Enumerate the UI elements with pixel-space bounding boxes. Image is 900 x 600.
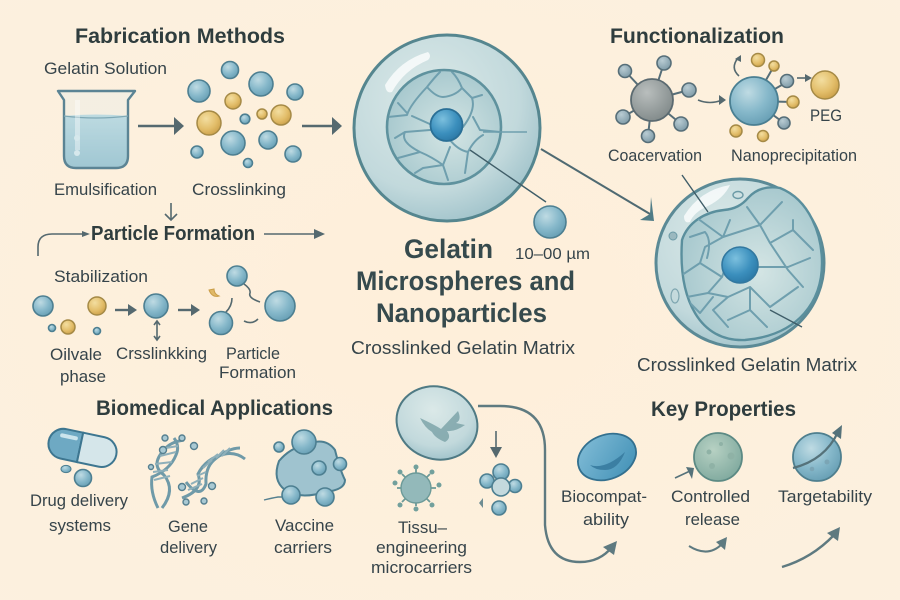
label: vaccine carriers	[274, 516, 334, 557]
icon: tissue sphere with bird	[386, 375, 488, 471]
label: particle formation: Particle	[226, 344, 280, 363]
particle formation cluster	[209, 266, 295, 334]
title	[356, 234, 575, 328]
droplet cluster	[188, 62, 303, 168]
label: biocompatibility	[561, 487, 647, 529]
arrow: long curve from tissue sphere to properties	[478, 406, 617, 562]
arrow: down to particle formation	[165, 203, 177, 220]
label: crosslinking: Crosslinking	[192, 180, 286, 199]
label: gelatin solution: Gelatin Solution	[44, 59, 167, 78]
arrow: down to cluster	[490, 431, 502, 458]
icon: biocompatibility leaf	[571, 425, 643, 489]
label: drug delivery systems: systems	[49, 516, 111, 535]
arrow: to peg	[797, 74, 812, 82]
label: coacervation: Coacervation	[608, 146, 702, 165]
label: gene delivery	[160, 517, 218, 557]
subtitle: crosslinked gelatin matrix: Crosslinked Gelatin Matrix	[351, 337, 576, 358]
icon: beaker with solution	[58, 91, 135, 168]
title: Gelatin	[404, 234, 493, 264]
panel: key properties	[561, 397, 873, 567]
icon: virus carrier	[392, 464, 442, 512]
heading: fabrication methods: Fabrication Methods	[75, 24, 285, 48]
icon: vaccine carrier blob	[264, 430, 346, 506]
icon: capsule	[46, 426, 119, 486]
label: controlled release: release	[685, 510, 740, 529]
label: oilvale phase: phase	[60, 367, 106, 386]
label: nanoprecipitation: Nanoprecipitation	[731, 146, 857, 165]
label: targetability: Targetability	[778, 487, 873, 506]
label: peg: PEG	[810, 106, 842, 125]
label: tissue engineering microcarriers: engineering	[376, 538, 467, 557]
arrow: targetability swoosh	[782, 527, 840, 567]
icon: peg sphere	[811, 71, 839, 99]
title: Nanoparticles	[376, 298, 547, 328]
particle with double arrow	[144, 294, 168, 340]
particle cluster	[479, 464, 522, 515]
icon: controlled release sphere	[675, 433, 742, 481]
label: stabilization: Stabilization	[54, 267, 148, 286]
arrow: central sphere to detail sphere	[541, 149, 654, 221]
arrow: controlled release swoosh	[689, 537, 727, 552]
panel: fabrication methods	[33, 24, 342, 386]
icon: functionalized particle	[730, 54, 799, 142]
icon: targetability sphere	[793, 425, 842, 481]
label: oilvale phase: Oilvale	[50, 345, 102, 364]
heading: functionalization: Functionalization	[610, 24, 784, 48]
label: oilvale phase	[50, 345, 106, 386]
label: particle formation	[219, 344, 296, 382]
label: biocompatibility: ability	[583, 510, 630, 529]
title: Microspheres and	[356, 266, 575, 296]
label: crosslinked gelatin matrix: Crosslinked Gelatin Matrix	[637, 354, 858, 375]
panel: functionalization	[608, 24, 857, 165]
label: drug delivery systems: Drug delivery	[30, 491, 129, 510]
label: tissue engineering microcarriers: Tissu–	[398, 518, 448, 537]
label: gene delivery: delivery	[160, 538, 218, 557]
label: biocompatibility: Biocompat-	[561, 487, 647, 506]
leader: matrix	[770, 310, 802, 327]
arrow: particle formation outward	[264, 229, 325, 239]
label: emulsification: Emulsification	[54, 180, 157, 199]
label: size range: 10–00 µm	[515, 246, 590, 263]
diagram: cutaway detail sphere	[656, 179, 824, 347]
label: drug delivery systems	[30, 491, 129, 535]
heading: key properties: Key Properties	[651, 397, 796, 421]
leader: sphere to small particle	[470, 150, 546, 202]
arrow: curved into particle formation	[38, 231, 90, 256]
subheading: particle formation: Particle Formation	[91, 223, 255, 245]
icon: dna strands	[148, 435, 245, 508]
panel: biomedical applications	[30, 375, 522, 577]
diagram: central microsphere	[354, 35, 540, 221]
arrow: droplets to particle	[115, 304, 137, 316]
label: tissue engineering microcarriers	[371, 518, 472, 577]
label: vaccine carriers: Vaccine	[275, 516, 334, 535]
arrow: coacervation to nanoprecipitation	[698, 95, 726, 105]
heading: biomedical applications: Biomedical Applications	[96, 396, 333, 420]
label: vaccine carriers: carriers	[274, 538, 332, 557]
arrow: beaker to droplets	[138, 117, 184, 135]
label: gene delivery: Gene	[168, 517, 208, 536]
small particle	[534, 206, 566, 238]
label: crsslinkking: Crsslinkking	[116, 344, 207, 363]
arrow: particle to formation	[178, 304, 200, 316]
stabilization droplets	[33, 296, 106, 334]
arrow: droplets to microsphere	[302, 117, 342, 135]
leader: outer shell	[682, 175, 708, 212]
label: controlled release: Controlled	[671, 487, 750, 506]
icon: coacervation particle	[616, 56, 696, 142]
label: controlled release	[671, 487, 750, 529]
label: particle formation: Formation	[219, 363, 296, 382]
label: tissue engineering microcarriers: microcarriers	[371, 558, 472, 577]
